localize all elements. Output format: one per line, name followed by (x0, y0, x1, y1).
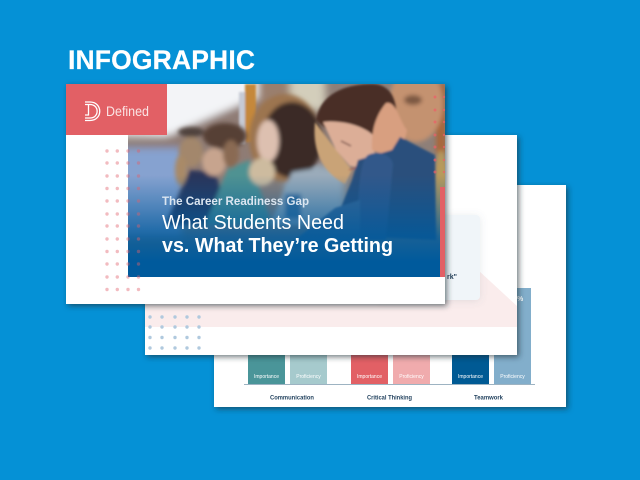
cover title text: What Students Need (162, 212, 344, 234)
main woman (285, 84, 436, 250)
bar chart: skills importance vs proficiency: % (517, 296, 524, 303)
heading: INFOGRAPHIC: INFOGRAPHIC (68, 45, 255, 75)
right-hand person and golden background (389, 84, 445, 232)
icon: Defined logo mark (85, 102, 100, 120)
bar chart: skills importance vs proficiency: Importance (458, 374, 483, 380)
background students (165, 94, 345, 225)
blue gradient overlay (128, 175, 445, 277)
pink dot pattern, left (105, 149, 140, 291)
cover title text: vs. What They’re Getting (162, 235, 393, 257)
bar chart: skills importance vs proficiency: Teamwork (474, 394, 503, 402)
blurred backdrop (120, 76, 345, 238)
bar chart: skills importance vs proficiency: Communication (270, 394, 314, 402)
bar chart: skills importance vs proficiency: Proficiency (296, 374, 321, 380)
bar chart: skills importance vs proficiency (244, 288, 535, 402)
pink diagonal band (145, 270, 517, 327)
bar chart: skills importance vs proficiency: Importance (254, 374, 279, 380)
quote card: rk" (447, 274, 457, 281)
bar chart: skills importance vs proficiency: Proficiency (500, 374, 525, 380)
cover title text: The Career Readiness Gap (162, 194, 309, 208)
photo: students working at a table (128, 84, 445, 277)
panel: middle page with quote card (145, 135, 517, 355)
pink dot pattern, right (434, 96, 445, 174)
pink accent strip (440, 187, 445, 277)
cover title text (162, 194, 393, 257)
logo block: Defined (66, 84, 167, 135)
logo block: Defined: Defined (106, 103, 149, 119)
bar chart: skills importance vs proficiency: Proficiency (399, 374, 424, 380)
panel: back page with bar chart (214, 185, 566, 407)
bar chart: skills importance vs proficiency: Importance (357, 374, 382, 380)
blue dot pattern (148, 315, 201, 350)
bar chart: skills importance vs proficiency: Critical Thinking (367, 394, 412, 402)
panel: front cover page (66, 66, 448, 304)
quote card (380, 215, 480, 300)
